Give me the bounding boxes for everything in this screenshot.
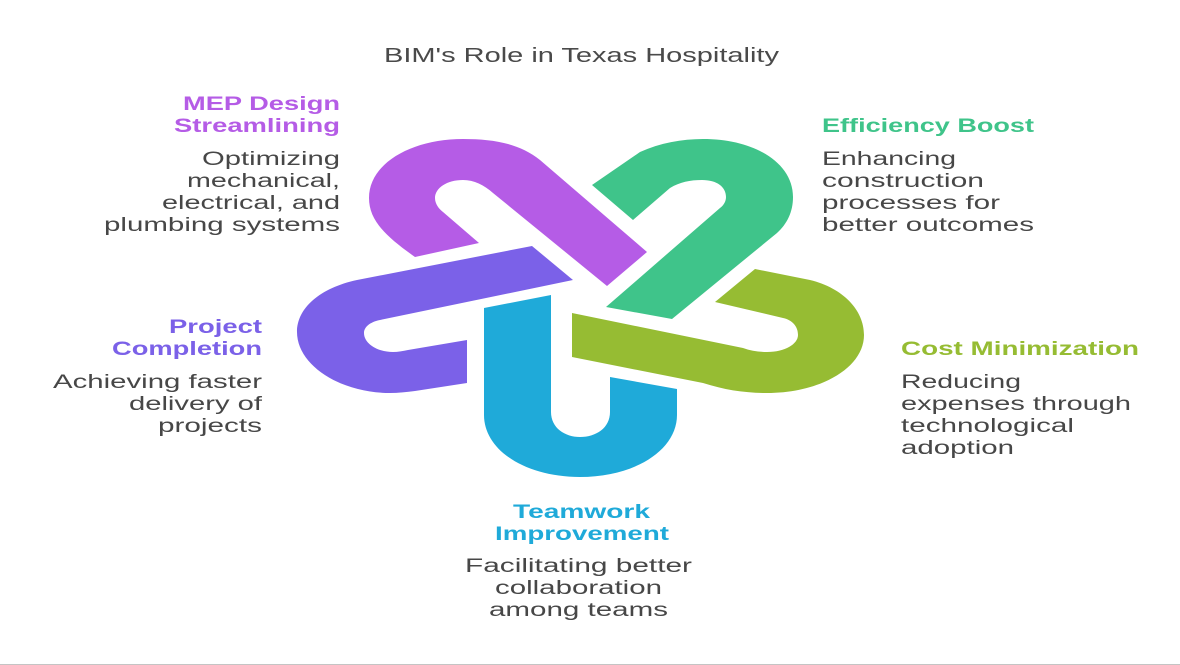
description (465, 556, 693, 621)
description: delivery of (129, 394, 263, 415)
description: mechanical, (187, 171, 340, 192)
description: processes for (822, 193, 1001, 214)
knot diagram (297, 139, 864, 477)
description (53, 372, 263, 437)
description: technological (901, 416, 1074, 437)
link: Project violet (297, 246, 573, 393)
description: adoption (901, 438, 1014, 459)
panel: Teamwork Improvement (465, 501, 693, 621)
description: Enhancing (822, 149, 956, 170)
description: expenses through (901, 394, 1131, 415)
description: among teams (489, 600, 668, 621)
panel: MEP Design Streamlining (104, 93, 340, 236)
link: Teamwork blue (484, 295, 677, 477)
description: projects (158, 416, 262, 437)
heading (112, 316, 263, 360)
heading: Streamlining (174, 115, 340, 137)
panel: Cost Minimization (901, 338, 1139, 459)
heading: Improvement (495, 523, 670, 545)
description: plumbing systems (104, 215, 340, 236)
description: Achieving faster (53, 372, 263, 393)
description (901, 372, 1131, 459)
link: Cost olive (572, 269, 864, 393)
description: Reducing (901, 372, 1021, 393)
heading: Project (169, 316, 263, 338)
heading: Cost Minimization (901, 338, 1139, 360)
description: electrical, and (162, 193, 340, 214)
description: construction (822, 171, 984, 192)
description: Optimizing (202, 149, 340, 170)
description: collaboration (495, 578, 662, 599)
description (104, 149, 340, 236)
link: Efficiency green (592, 139, 793, 319)
heading: Teamwork (513, 501, 650, 523)
title: BIM's Role in Texas Hospitality (384, 45, 779, 67)
panel: Project Completion (53, 316, 263, 437)
heading: Completion (112, 338, 262, 360)
heading (174, 93, 340, 137)
panel: Efficiency Boost (822, 115, 1035, 236)
heading (495, 501, 670, 545)
heading: MEP Design (183, 93, 340, 115)
description (822, 149, 1034, 236)
description: Facilitating better (465, 556, 693, 577)
description: better outcomes (822, 215, 1034, 236)
heading: Efficiency Boost (822, 115, 1035, 137)
link: MEP Design purple (369, 139, 647, 286)
